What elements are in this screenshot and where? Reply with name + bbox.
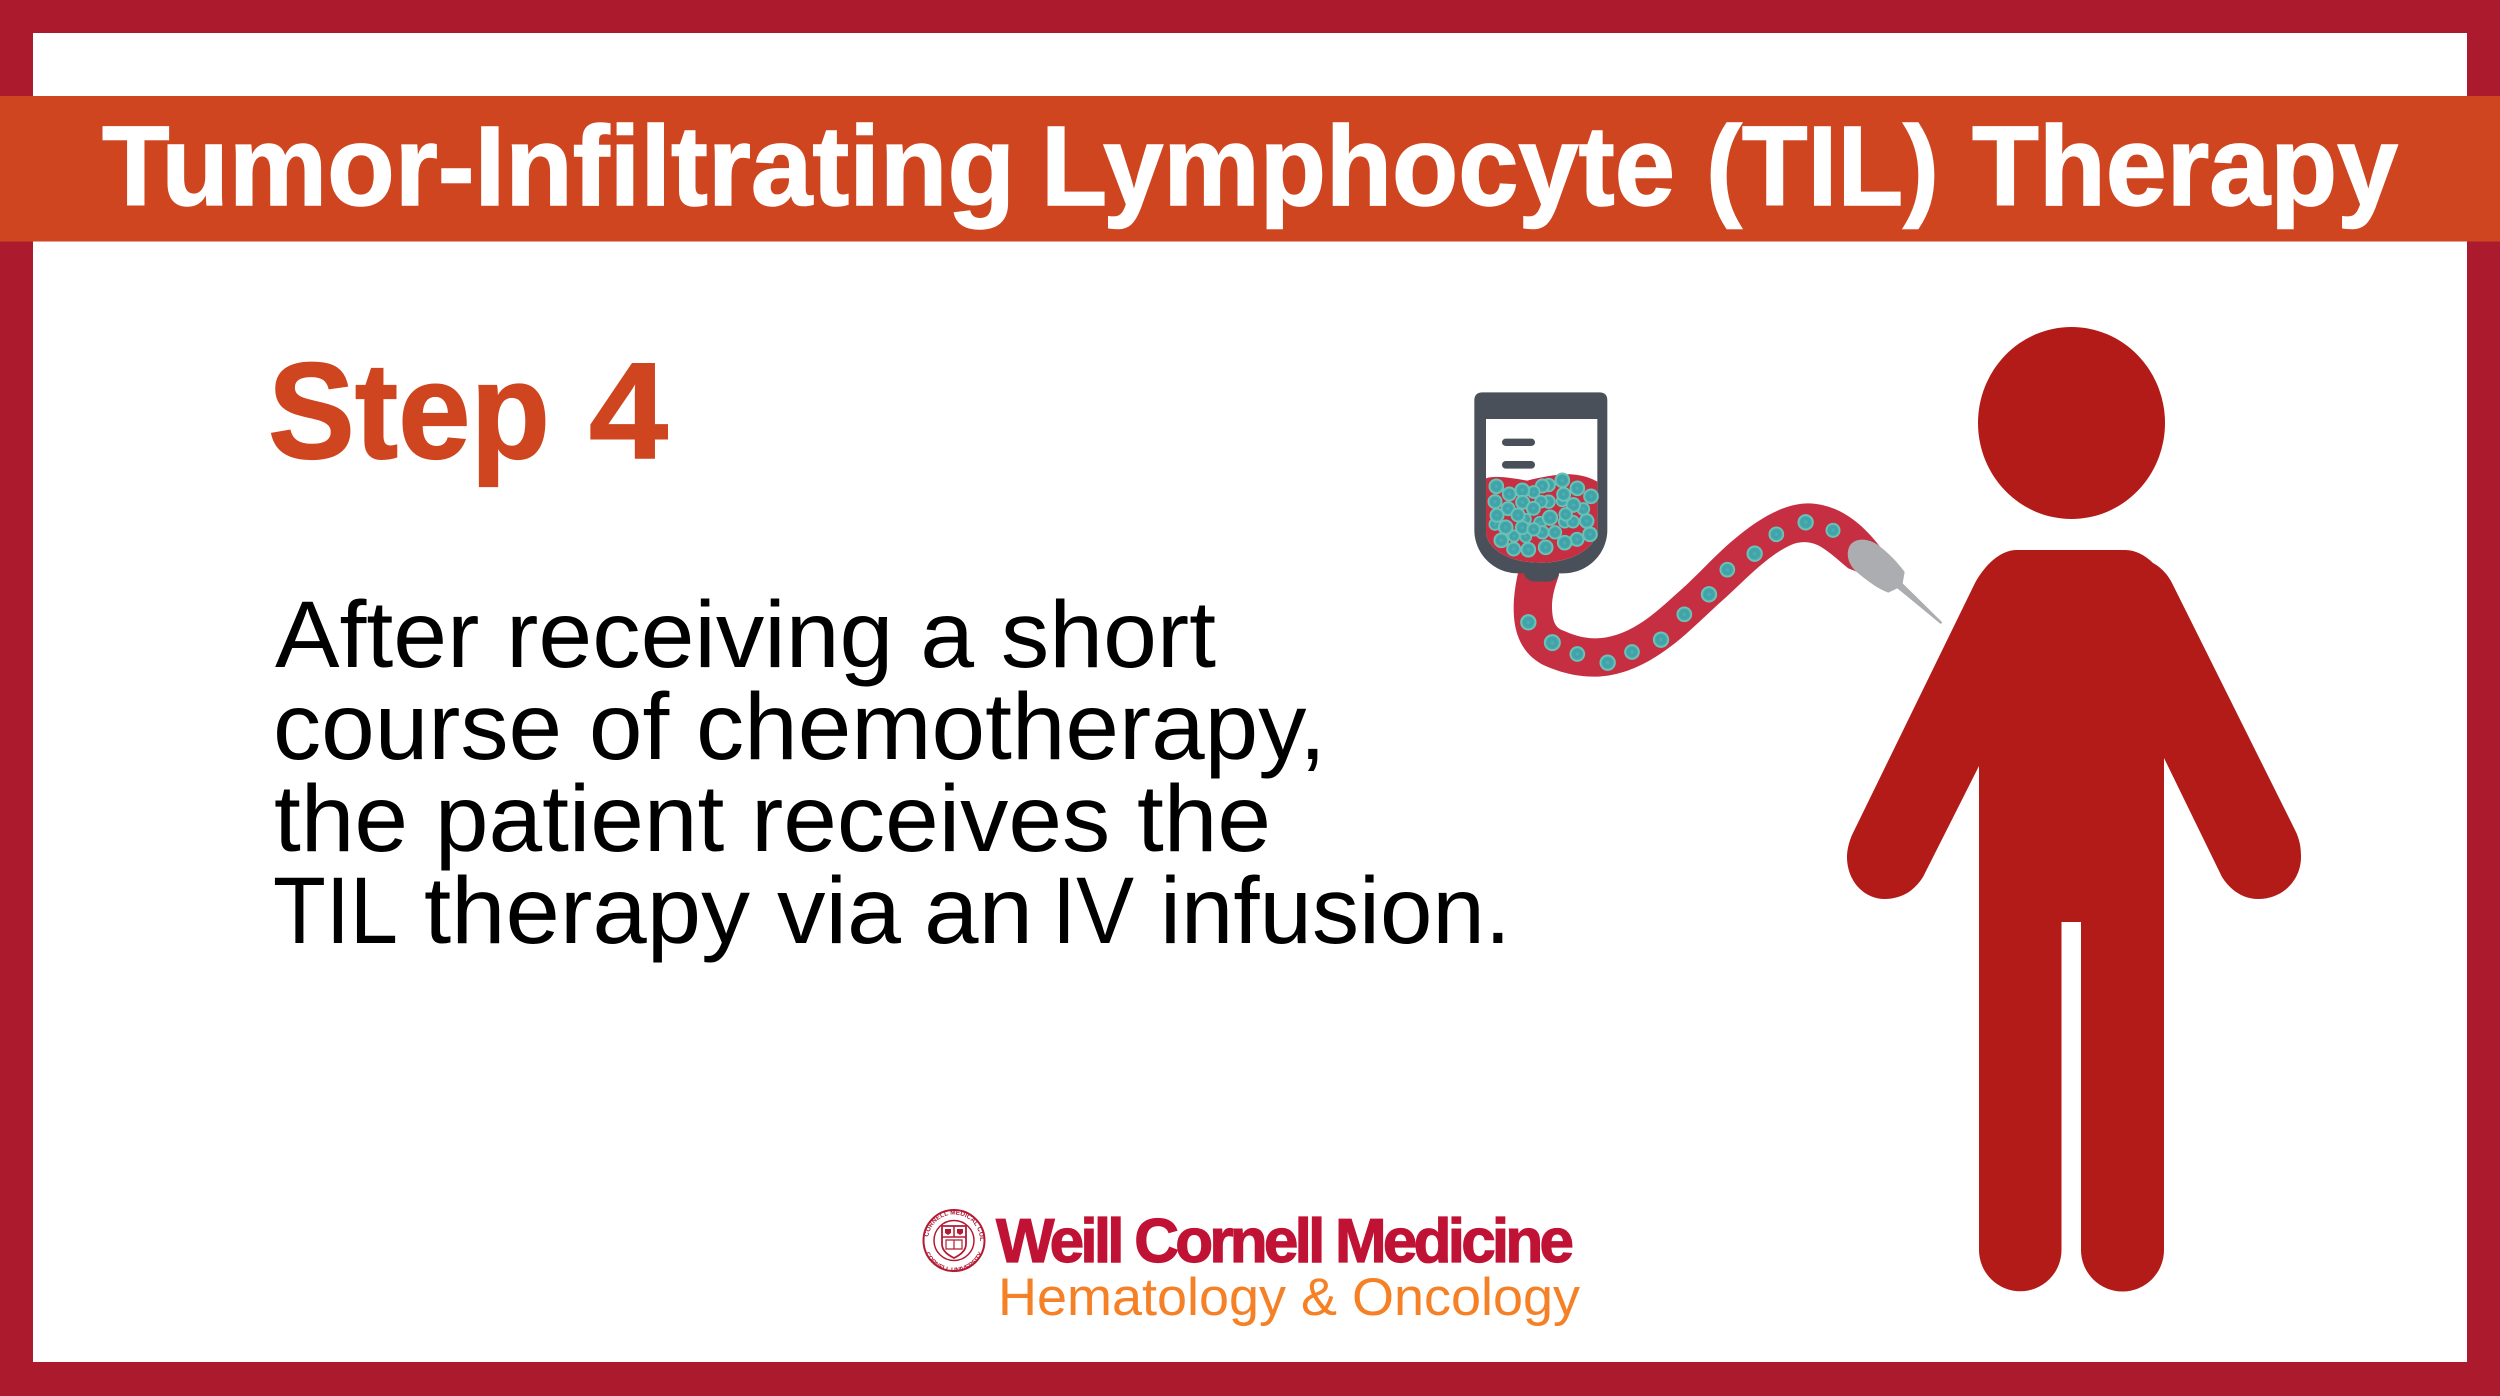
title banner [0,96,2500,242]
icon: university seal: WEILL CORNELL MEDICAL COLLEGE [924,1211,984,1241]
IV bag casing [1474,392,1607,582]
description text: IV [1052,858,1134,964]
description text: infusion. [1160,858,1511,964]
icon: IV bag and tube [1474,392,1942,677]
logo department: Hematology & Oncology [998,1268,1581,1327]
step heading: 4 [589,335,668,488]
description text: course of chemotherapy, [273,674,1326,780]
icon: patient figure [1847,327,2301,1292]
title banner: (TIL) [1706,103,1939,229]
description text: After receiving a short [275,582,1216,688]
bag fluid [1486,474,1597,563]
logo: Weill Cornell Medicine [922,1207,1581,1327]
description text: an [924,858,1033,964]
title banner: Therapy [1972,103,2398,229]
needle connector [1848,540,1942,624]
patient head [1978,327,2165,519]
cells in bag [1488,473,1598,557]
bag window [1486,419,1597,563]
patient body [1847,550,2301,1292]
description text: therapy [424,858,751,964]
IV tube [1514,503,1880,677]
step heading: Step [268,335,550,488]
description text: via [777,858,901,964]
description text [273,582,1511,964]
bag label lines [1502,439,1535,469]
title banner: Tumor-Infiltrating [102,103,1015,229]
title banner: Lymphocyte [1041,103,1675,229]
logo wordmark: Weill Cornell Medicine [996,1207,1574,1276]
icon: university seal: CORNELL UNIVERSITY [926,1252,982,1272]
cells in tube [1521,515,1840,670]
description text: TIL [273,858,398,964]
icon: university seal [922,1209,986,1272]
description text: the patient receives the [274,766,1271,872]
